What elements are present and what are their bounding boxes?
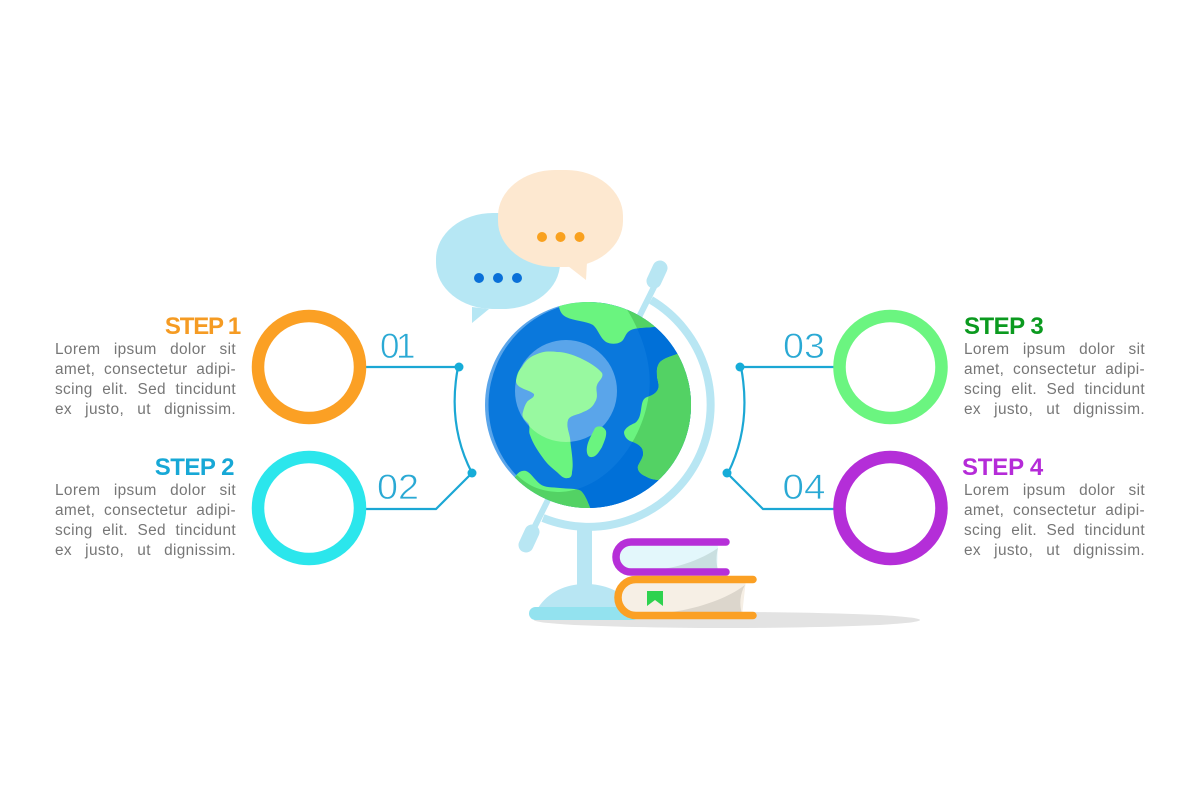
- speech bubble: orange: [498, 170, 623, 280]
- book: purple: [616, 542, 726, 572]
- text: step 2: ex justo, ut dignissim.: [55, 542, 236, 559]
- text: step 1: [55, 341, 236, 418]
- text: step 4: scing elit. Sed tincidunt: [964, 522, 1145, 539]
- speech bubble: blue: [436, 213, 560, 323]
- text: step 3: [964, 341, 1145, 418]
- panel: step 2: [55, 454, 236, 559]
- globe rim: [485, 302, 691, 508]
- number 01: 01: [380, 327, 415, 366]
- number 04: 04: [782, 468, 826, 507]
- text: step 1: scing elit. Sed tincidunt: [55, 381, 236, 398]
- stand bottom knob: [526, 532, 532, 545]
- stand base: [529, 607, 639, 620]
- text: step 3: amet, consectetur adipi-: [964, 361, 1145, 378]
- text: step 3: scing elit. Sed tincidunt: [964, 381, 1145, 398]
- heading: step 1: STEP 1: [165, 313, 240, 340]
- book: orange: [618, 580, 753, 616]
- stand pole: [577, 526, 592, 588]
- panel: step 3: [964, 313, 1145, 418]
- text: step 4: amet, consectetur adipi-: [964, 502, 1145, 519]
- text: step 1: ex justo, ut dignissim.: [55, 401, 236, 418]
- connector: 03 and 04: [722, 362, 834, 509]
- stand axis: [528, 285, 655, 540]
- globe stand: [526, 268, 711, 620]
- ring: step 1: [258, 316, 360, 418]
- heading: step 4: STEP 4: [962, 454, 1043, 481]
- text: step 2: Lorem ipsum dolor sit: [55, 482, 236, 499]
- text: step 3: ex justo, ut dignissim.: [964, 401, 1145, 418]
- text: step 3: Lorem ipsum dolor sit: [964, 341, 1145, 358]
- stand dome: [538, 584, 634, 608]
- icon: bookmark: [647, 591, 663, 606]
- text: step 2: [55, 482, 236, 559]
- number 02: 02: [377, 468, 419, 507]
- ground shadow: [534, 612, 920, 628]
- panel: step 4: [962, 454, 1145, 559]
- globe: [485, 302, 691, 508]
- panel: step 1: [55, 313, 241, 418]
- ring: step 4: [840, 457, 942, 559]
- ring: step 2: [258, 457, 360, 559]
- stand arc: [543, 300, 711, 527]
- text: step 2: scing elit. Sed tincidunt: [55, 522, 236, 539]
- number 03: 03: [783, 327, 825, 366]
- connector: 01 and 02: [366, 362, 476, 509]
- text: step 1: Lorem ipsum dolor sit: [55, 341, 236, 358]
- stand top knob: [654, 268, 660, 281]
- text: step 1: amet, consectetur adipi-: [55, 361, 236, 378]
- text: step 4: Lorem ipsum dolor sit: [964, 482, 1145, 499]
- heading: step 3: STEP 3: [964, 313, 1043, 340]
- ring: step 3: [840, 316, 942, 418]
- text: step 4: ex justo, ut dignissim.: [964, 542, 1145, 559]
- text: step 2: amet, consectetur adipi-: [55, 502, 236, 519]
- heading: step 2: STEP 2: [155, 454, 234, 481]
- text: step 4: [964, 482, 1145, 559]
- globe ocean: [488, 302, 691, 508]
